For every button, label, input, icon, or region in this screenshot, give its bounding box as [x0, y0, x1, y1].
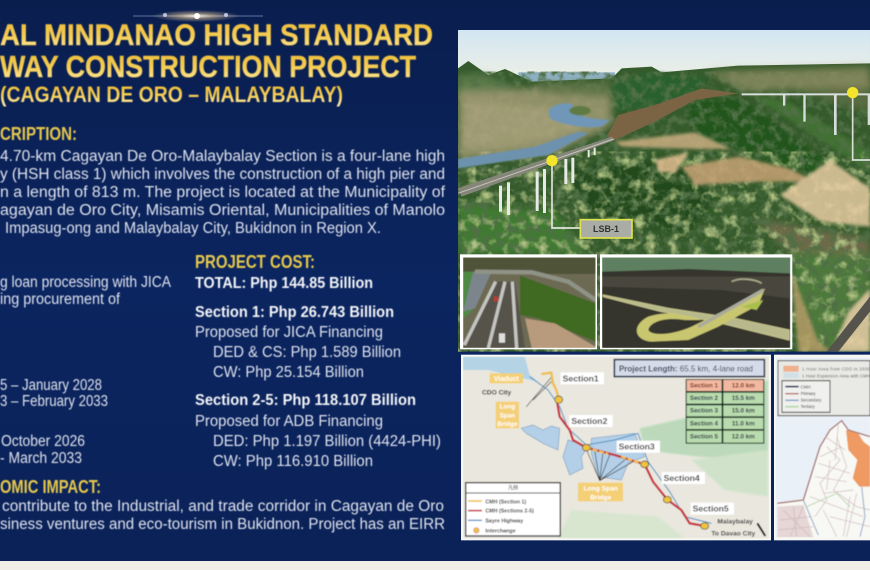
marker: far bridge	[847, 87, 858, 98]
economic impact	[0, 476, 445, 533]
section length table: 12.0 km	[732, 434, 755, 441]
map legend	[466, 483, 560, 536]
project cost: DED & CS: Php 1.589 Billion	[213, 344, 401, 361]
project description: 4.70-km Cagayan De Oro-Malaybalay Section is a four-lane high	[0, 148, 445, 165]
project cost: Section 2-5: Php 118.107 Billion	[195, 392, 416, 409]
status text: ing procurement of	[0, 291, 121, 308]
section length table: Section 4	[690, 420, 719, 427]
section length table: Section 3	[690, 408, 719, 415]
section length table: Section 5	[690, 434, 719, 441]
lighter vegetation texture	[458, 152, 870, 352]
sea horizon	[518, 72, 615, 82]
map base land	[463, 357, 769, 538]
panel: one-hour area map	[774, 355, 870, 540]
marker leader: far bridge	[853, 93, 870, 160]
section labels: Section3	[619, 442, 655, 452]
terrain colour regions	[458, 75, 870, 352]
label: long span bridge 2: Bridge	[590, 494, 611, 501]
title	[0, 19, 433, 107]
panel: route map	[461, 355, 771, 540]
route long-span segment	[586, 448, 645, 464]
mottled vegetation texture	[458, 72, 870, 352]
title: (CAGAYAN DE ORO – MALAYBALAY)	[0, 82, 343, 107]
title: WAY CONSTRUCTION PROJECT	[0, 49, 416, 84]
map legend: Sayre Highway	[485, 518, 523, 524]
area legend: 1 Hour Area from CDO in 2030	[802, 367, 870, 372]
implementation schedule: - March 2033	[0, 450, 82, 467]
marker: LSB-1	[546, 155, 558, 166]
section length table	[686, 379, 764, 444]
section length table: Section 1	[690, 382, 719, 389]
area legend: Secondary	[801, 398, 822, 403]
sea	[463, 357, 538, 382]
sky	[458, 30, 870, 76]
far viaduct and piers	[742, 93, 870, 135]
project cost: DED: Php 1.197 Billion (4424-PHI)	[213, 433, 441, 450]
area legend	[778, 361, 870, 416]
label: long span bridge 1: Bridge	[497, 421, 518, 428]
bridge piers	[499, 148, 596, 215]
economic impact: OMIC IMPACT:	[0, 476, 101, 497]
label: long span bridge 1	[496, 402, 519, 428]
label: long span bridge 2: Long Span	[583, 486, 618, 493]
forest areas	[558, 380, 768, 538]
section labels: Section2	[571, 416, 608, 426]
project cost: TOTAL: Php 144.85 Billion	[195, 275, 373, 292]
project cost	[195, 251, 441, 470]
section labels	[561, 372, 734, 515]
map legend: CMH (Section 1)	[485, 499, 526, 505]
route sections 2-5	[557, 403, 705, 526]
project length box	[614, 360, 764, 377]
project description: Impasug-ong and Malaybalay City, Bukidnon in Region X.	[5, 220, 381, 237]
map legend: 凡例	[508, 485, 518, 492]
place labels	[482, 390, 765, 538]
label: long span bridge 1: Long	[500, 404, 515, 411]
label: LSB-1: LSB-1	[593, 224, 619, 234]
map legend: CMH (Sections 2-5)	[485, 509, 534, 515]
title decorative sparkle	[133, 10, 263, 22]
status text: g loan processing with JICA	[0, 274, 172, 291]
valley and ridge land tones	[458, 67, 870, 160]
section labels: Section1	[563, 373, 599, 383]
section length table: 15.5 km	[732, 395, 755, 402]
road at lower right	[827, 297, 870, 352]
section labels: Section5	[693, 504, 729, 514]
map frame	[461, 355, 771, 540]
project description: agayan de Oro City, Misamis Oriental, Municipalities of Manolo	[0, 202, 445, 219]
project cost: Proposed for ADB Financing	[195, 413, 383, 430]
area legend: Primary	[801, 391, 816, 396]
label: viaduct	[490, 373, 523, 383]
project cost: CW: Php 25.154 Billion	[213, 364, 364, 381]
brown road cut	[607, 88, 738, 140]
area legend: Tertiary	[801, 404, 816, 409]
area legend: CMH	[801, 384, 811, 389]
route section 1	[541, 373, 559, 399]
place labels: CDO City	[482, 390, 512, 397]
section length table: 11.0 km	[732, 420, 755, 427]
implementation schedule: 3 – February 2033	[0, 393, 108, 410]
exposed soil patches	[615, 132, 870, 352]
section length table: 15.0 km	[732, 408, 755, 415]
project cost: PROJECT COST:	[195, 251, 315, 272]
inset: highway portal view	[460, 254, 597, 349]
implementation schedule	[0, 377, 108, 467]
section length table: 12.0 km	[732, 382, 755, 389]
inset: interchange view	[600, 254, 792, 349]
map frame	[774, 355, 870, 540]
economic impact: siness ventures and eco-tourism in Bukidnon. Project has an EIRR	[0, 516, 445, 533]
tertiary roads	[807, 493, 850, 507]
economic impact: contribute to the Industrial, and trade corridor in Cagayan de Oro	[2, 498, 444, 515]
bottom page strip	[0, 561, 870, 570]
marker leader: LSB-1	[552, 162, 581, 228]
project cost: Proposed for JICA Financing	[195, 324, 383, 341]
road network	[778, 425, 870, 537]
project description: y (HSH class 1) which involves the construction of a high pier and	[0, 166, 445, 183]
section length table: Section 2	[690, 395, 719, 402]
project description: n a length of 813 m. The project is located at the Municipality of	[0, 184, 446, 201]
project description	[0, 123, 446, 237]
Sayre highway	[530, 377, 711, 523]
label: long span bridge 1: Span	[500, 412, 515, 419]
panel: 3D terrain view	[458, 30, 870, 352]
river	[458, 103, 610, 168]
project length box: Project Length: 65.5 km, 4-lane road	[619, 363, 753, 373]
leader lines	[526, 377, 633, 481]
map legend: Interchange	[485, 528, 516, 534]
title: AL MINDANAO HIGH STANDARD	[0, 19, 433, 52]
status text	[0, 274, 172, 308]
implementation schedule: October 2026	[1, 433, 85, 450]
interchange markers	[555, 396, 709, 529]
watershed areas	[521, 425, 645, 480]
orange one-hour area	[846, 430, 870, 487]
viaduct deck	[458, 137, 615, 197]
place labels: To Davao City	[711, 531, 756, 538]
town cluster	[777, 505, 813, 537]
project cost: Section 1: Php 26.743 Billion	[195, 304, 394, 321]
project cost: CW: Php 116.910 Billion	[213, 453, 373, 470]
secondary roads	[803, 487, 865, 537]
project description: CRIPTION:	[0, 123, 77, 144]
place labels: Malaybalay	[717, 518, 753, 525]
map area	[776, 357, 870, 537]
terrain base	[458, 61, 870, 352]
section labels: Section4	[664, 473, 700, 483]
label: LSB-1	[580, 220, 632, 238]
label: viaduct: Viaduct	[494, 376, 520, 383]
label: long span bridge 2	[578, 483, 623, 501]
implementation schedule: 5 – January 2028	[0, 377, 102, 394]
area legend: 1 Hour Expansion Area with CMH	[802, 374, 870, 379]
